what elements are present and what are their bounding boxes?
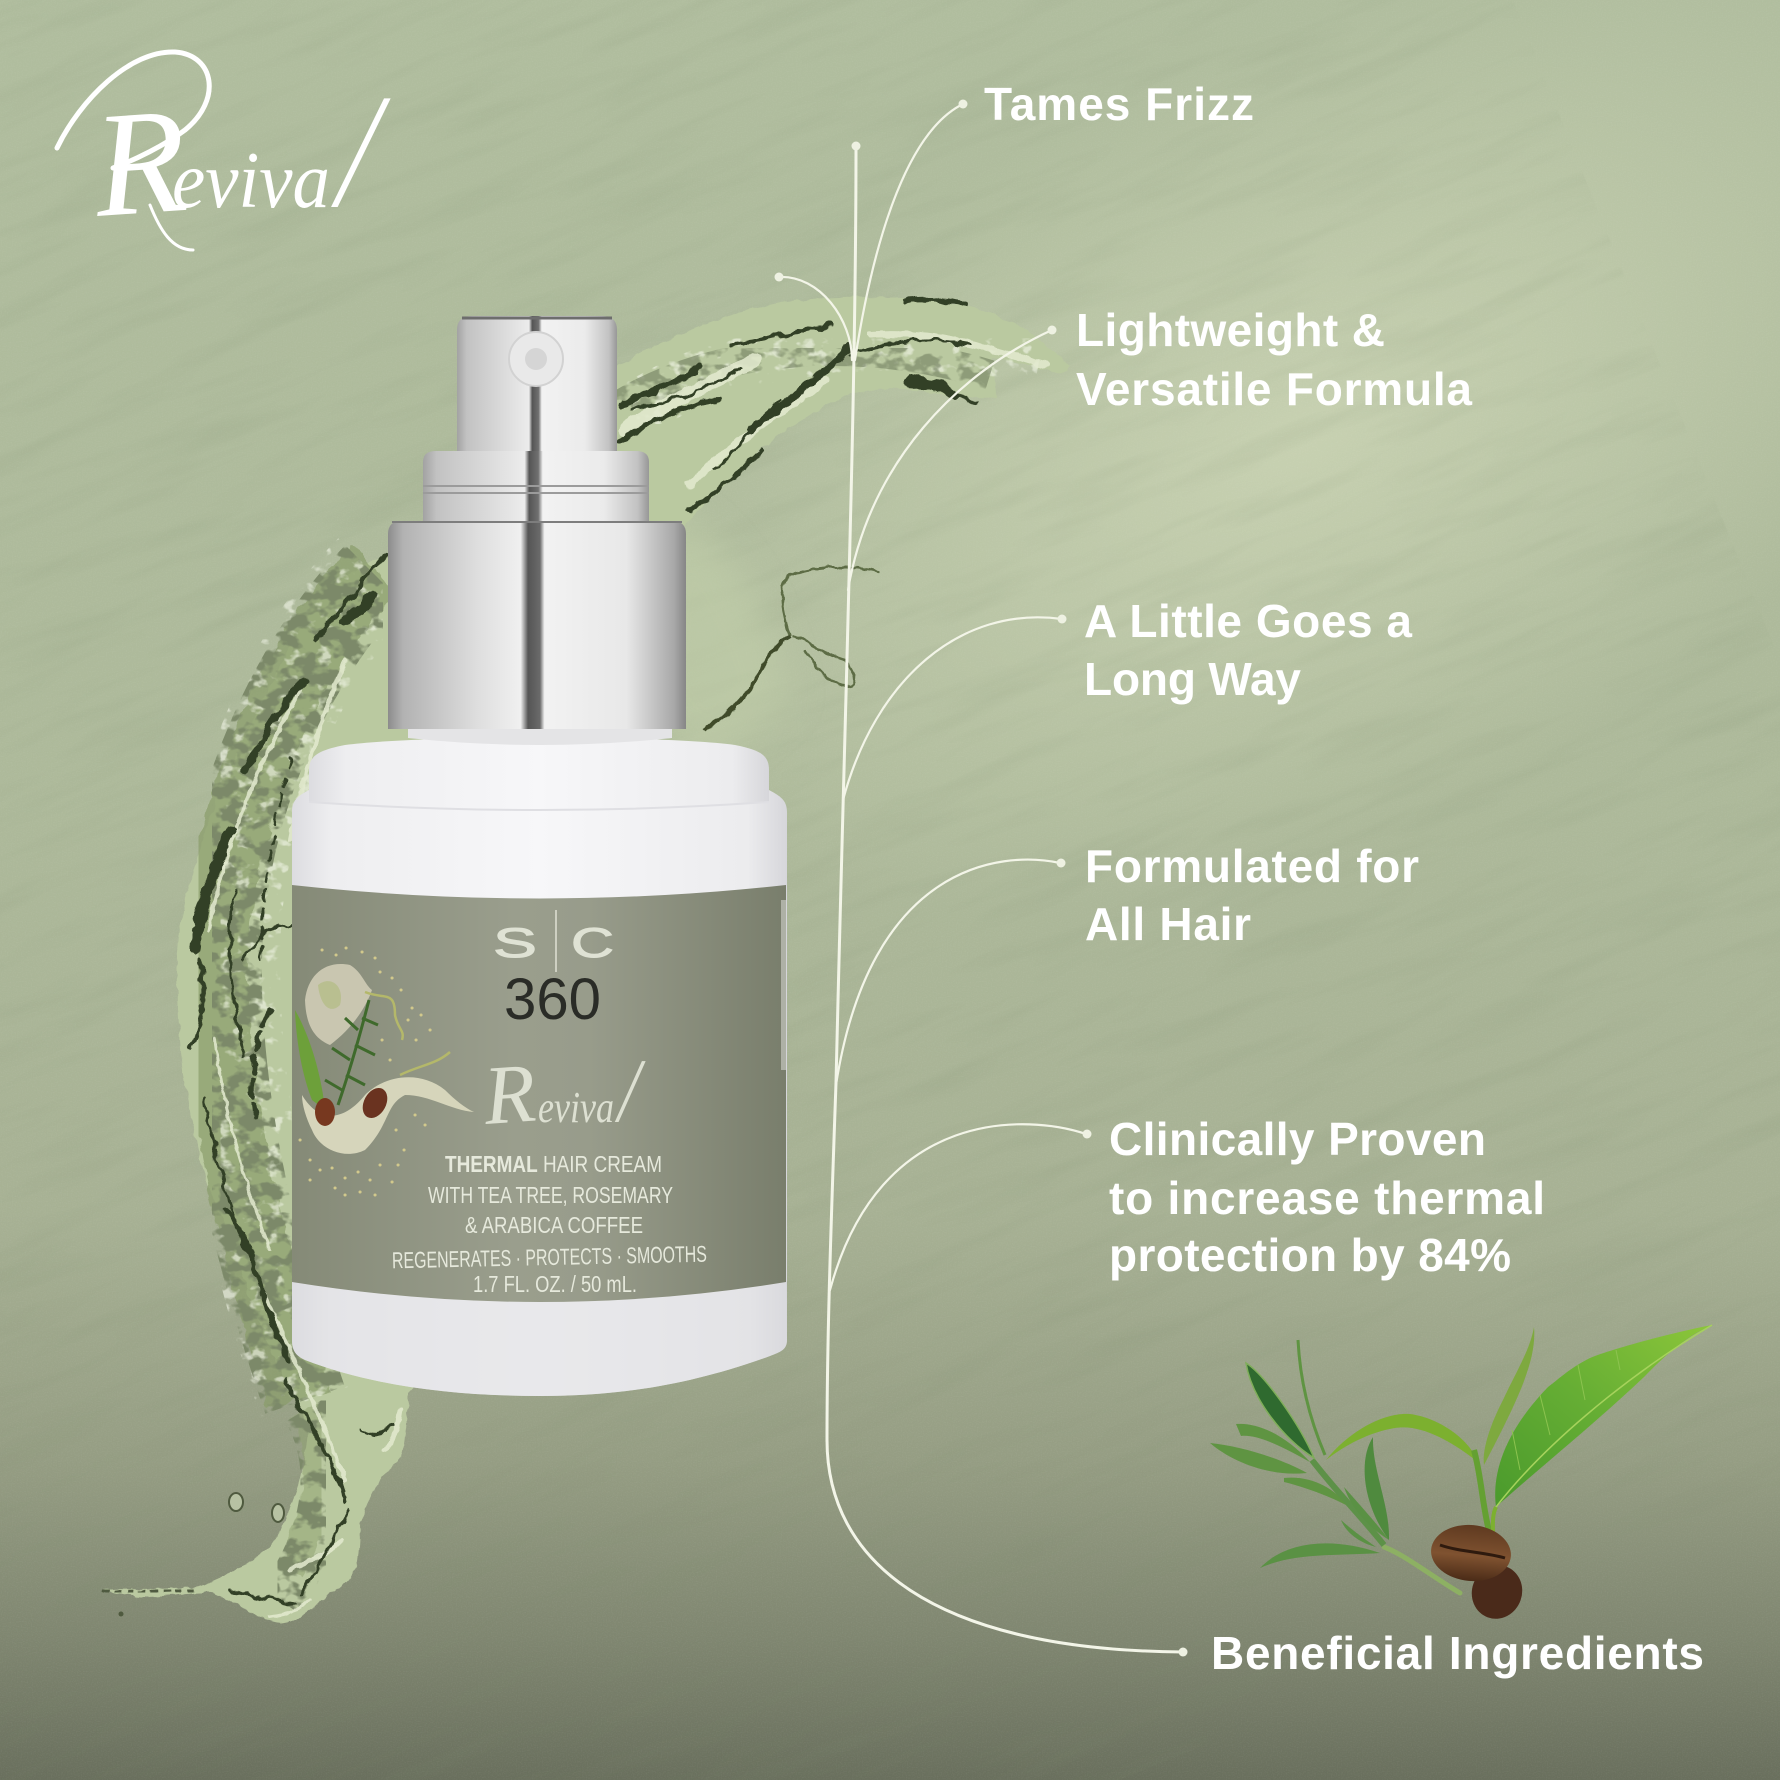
benefit: Clinically Proven: to increase thermal <box>1109 1172 1545 1224</box>
bottle body <box>292 790 787 1396</box>
base top edge <box>392 521 682 523</box>
label product text: WITH TEA TREE, ROSEMARY <box>428 1182 673 1208</box>
benefit: A Little Goes a Long Way <box>1084 595 1412 705</box>
bottle lower band shading <box>292 1282 787 1396</box>
label logo: S|C <box>493 910 614 972</box>
tea arched leaf and stem <box>1326 1414 1496 1535</box>
product bottle <box>292 316 787 1396</box>
metal collar <box>423 451 649 522</box>
label product text <box>392 1151 707 1297</box>
title: Revival script wordmark <box>57 52 408 250</box>
splash dark folds <box>190 299 975 1603</box>
splash speckle texture <box>220 343 1040 1600</box>
soft light sheet right of bottle <box>640 500 790 780</box>
benefit: Formulated for All Hair: All Hair <box>1085 898 1251 950</box>
benefit: Formulated for All Hair: Formulated for <box>1085 840 1419 892</box>
benefit: Formulated for All Hair <box>1085 840 1419 950</box>
label script name: R <box>480 1047 539 1143</box>
pump neck <box>408 726 672 745</box>
benefit: Lightweight and Versatile Formula <box>1076 304 1472 415</box>
splash tendril <box>705 567 880 730</box>
collar groove <box>423 486 649 493</box>
shoulder edge shadow <box>309 802 769 810</box>
label product text: THERMAL HAIR CREAM <box>445 1151 662 1177</box>
bottle shoulder <box>309 738 769 810</box>
tea shoot thin leaf <box>1484 1327 1534 1465</box>
label product text: & ARABICA COFFEE <box>465 1212 643 1238</box>
benefit: Lightweight and Versatile Formula: Versatile Formula <box>1076 363 1472 415</box>
label logo: S|C: S <box>493 919 537 966</box>
metal base <box>388 521 686 729</box>
splash mid-tone band <box>215 570 375 1400</box>
benefit: Clinically Proven <box>1109 1113 1545 1281</box>
label script name: eviva <box>538 1083 614 1132</box>
label logo: S|C: C <box>571 919 614 966</box>
label product text: REGENERATES · PROTECTS · SMOOTHS <box>392 1241 707 1273</box>
ingredients illustration: tea leaves, rosemary, coffee beans <box>1210 1325 1712 1626</box>
product label <box>292 880 786 1320</box>
tea leaf large <box>1495 1325 1712 1507</box>
benefit: Lightweight and Versatile Formula: Lightweight & <box>1076 304 1385 356</box>
splash highlights <box>208 334 1045 1617</box>
nozzle <box>509 332 563 386</box>
label illustration: splash and herbs <box>295 948 474 1195</box>
metal cap top <box>457 316 617 452</box>
benefit: Tames Frizz: Tames Frizz <box>984 78 1254 130</box>
title: Revival script wordmark: l <box>310 73 408 239</box>
label script name: l <box>604 1047 655 1141</box>
benefit: A Little Goes a Long Way: A Little Goes a <box>1084 595 1412 647</box>
coffee bean front <box>1429 1522 1513 1584</box>
rosemary sprig <box>1210 1340 1460 1593</box>
benefit: A Little Goes a Long Way: Long Way <box>1084 653 1301 705</box>
title: Revival script wordmark: R <box>88 77 192 249</box>
benefit: Clinically Proven: protection by 84% <box>1109 1229 1511 1281</box>
callout connector lines <box>774 100 1188 1656</box>
label product text: 1.7 FL. OZ. / 50 mL. <box>473 1271 637 1297</box>
coffee bean rear <box>1464 1558 1530 1626</box>
benefit: Beneficial Ingredients: Beneficial Ingredients <box>1211 1627 1704 1679</box>
splash body <box>103 297 1070 1623</box>
label script name <box>486 1061 646 1124</box>
label logo: 360: 360 <box>504 967 601 1032</box>
cap top edge <box>462 316 612 320</box>
green gel splash <box>103 297 1070 1623</box>
splash droplets and spray tip <box>103 1493 284 1616</box>
title: Revival script wordmark: eviva <box>172 137 330 225</box>
benefit: Clinically Proven: Clinically Proven <box>1109 1113 1486 1165</box>
